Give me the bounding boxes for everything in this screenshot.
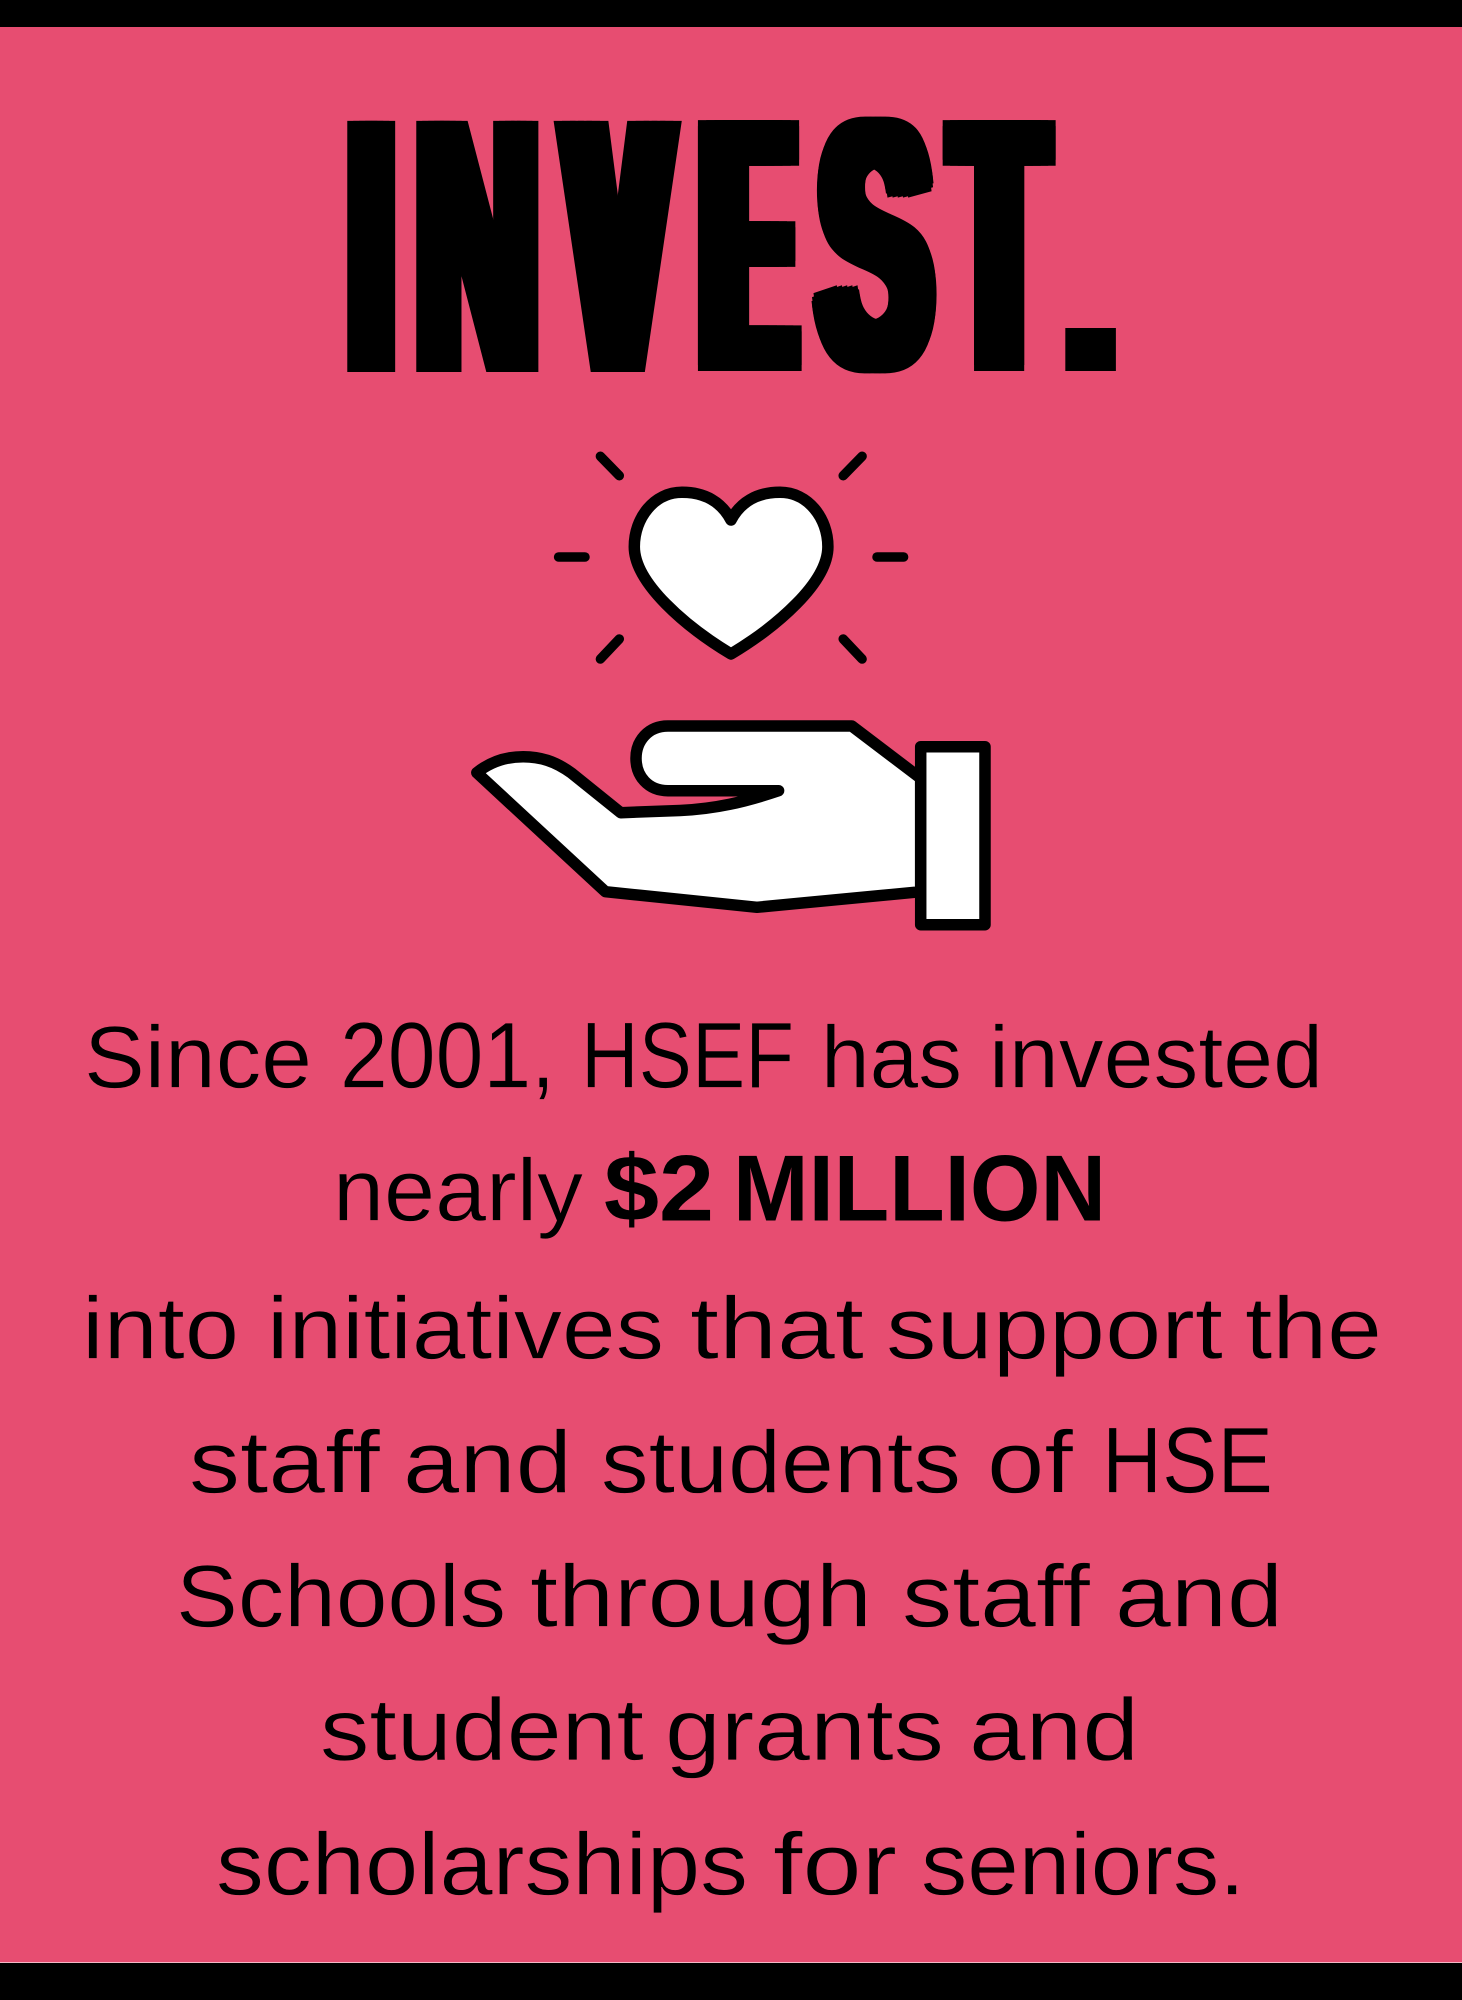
text: line 1: invested: [989, 1008, 1323, 1107]
icon: open hand: [477, 726, 921, 907]
text: line 6: and: [969, 1680, 1139, 1779]
text: line 4: [189, 1408, 1273, 1513]
text: line 2 with bold amount: nearly: [333, 1141, 583, 1240]
text: line 7: scholarships: [216, 1814, 748, 1913]
text: line 3: into: [82, 1279, 239, 1378]
text: line 3: [82, 1279, 1382, 1378]
icon: heart: [634, 492, 828, 654]
title: INVEST.: V: [569, 43, 666, 450]
text: line 1: [84, 1003, 1323, 1108]
text: line 4: and: [403, 1413, 572, 1512]
text: line 3: support: [886, 1279, 1223, 1378]
text: line 1: HSEF: [581, 1003, 794, 1108]
text: line 3: initiatives: [267, 1279, 664, 1378]
title: INVEST.: [347, 43, 1140, 913]
bottom black bar: [0, 1962, 1462, 2000]
text: line 4: students: [601, 1413, 961, 1512]
text: line 5: [176, 1547, 1283, 1646]
text: line 6: [320, 1680, 1139, 1779]
title: INVEST.: S: [819, 55, 931, 435]
text: line 3: that: [690, 1279, 864, 1378]
body text block: [82, 1003, 1382, 1913]
text: line 7: [216, 1814, 1245, 1913]
icon: radiating rays: [559, 456, 904, 659]
text: line 5: and: [1115, 1547, 1283, 1646]
text: line 1: has: [821, 1008, 962, 1107]
text: line 4: of: [987, 1413, 1074, 1512]
title: INVEST.: .: [1041, 110, 1140, 433]
text: line 2 with bold amount: [333, 1136, 1106, 1241]
text: line 5: Schools: [176, 1547, 506, 1646]
top black bar: [0, 0, 1462, 27]
text: line 5: staff: [902, 1547, 1091, 1646]
title: INVEST.: N: [417, 43, 537, 450]
title: INVEST.: T: [956, 47, 1042, 444]
text: line 1: 2001,: [340, 1003, 555, 1108]
title: INVEST.: E: [706, 47, 790, 444]
text: line 7: seniors.: [921, 1814, 1245, 1913]
text: line 4: staff: [189, 1413, 381, 1512]
text: line 6: grants: [665, 1680, 944, 1779]
title: INVEST.: I: [348, 43, 394, 450]
icon: shirt cuff: [921, 747, 985, 925]
text: line 7: for: [773, 1814, 897, 1913]
text: line 1: Since: [84, 1008, 312, 1107]
text: line 5: through: [530, 1547, 872, 1646]
text: line 2 with bold amount: MILLION: [733, 1136, 1106, 1241]
text: line 6: student: [320, 1680, 644, 1779]
text: line 4: HSE: [1102, 1408, 1273, 1513]
text: line 3: the: [1245, 1279, 1382, 1378]
text: line 2 with bold amount: $2: [604, 1136, 714, 1241]
icon: hand holding a glowing heart: [471, 452, 991, 930]
